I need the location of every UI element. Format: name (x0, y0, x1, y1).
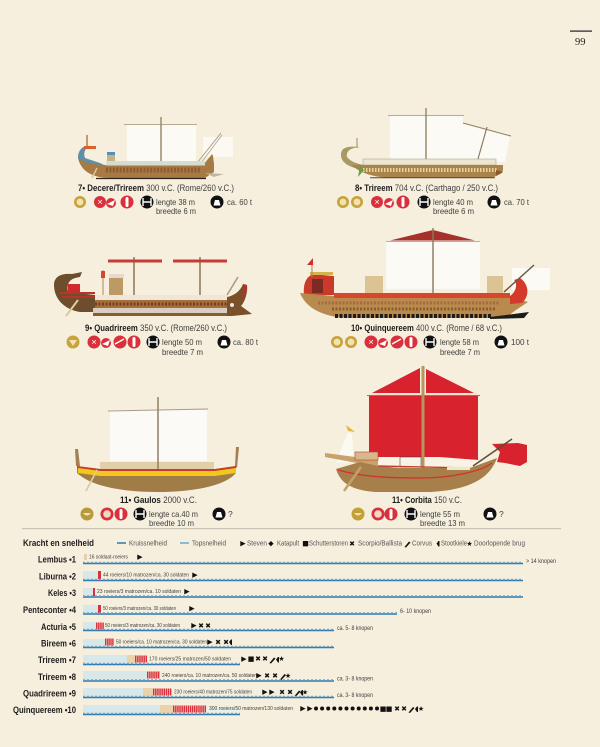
row 9 Quadrireem: ✖ (279, 688, 285, 696)
row 7 Trireem: ★ (278, 655, 285, 663)
icons and dimensions 8: ✕ (374, 198, 380, 206)
legend: Steven (247, 540, 267, 548)
row 9 Quadrireem (23, 688, 373, 699)
row 8 Trireem (38, 671, 373, 682)
icons and dimensions 10: ✕ (368, 338, 374, 346)
row 8 Trireem: 240 roeiers/ca. 10 matrozen/ca. 50 soldaten (162, 673, 257, 679)
row 10 Quinquereem: ★ (418, 705, 424, 713)
icons and dimensions 10: lengte 58 m (440, 337, 479, 347)
title 8: 8• Trireem 704 v.C. (Carthago / 250 v.C.) (355, 183, 498, 193)
row 7 Trireem: ■ (248, 655, 254, 663)
row 10 Quinquereem (13, 704, 424, 715)
icons and dimensions 7: ca. 60 t (227, 197, 253, 207)
row 5 Acturia: ✖ (205, 622, 211, 630)
heading: Kracht en snelheid: Kracht en snelheid (23, 538, 94, 548)
icons and dimensions 10 (331, 336, 530, 357)
row 3 Keles: Keles •3 (48, 588, 76, 598)
legend: ◆ (268, 540, 274, 548)
page number (570, 30, 592, 48)
ship illustration 10 (300, 228, 550, 319)
row 10 Quinquereem: Quinquereem •10 (13, 705, 76, 715)
row 4 Penteconter: 6- 10 knopen (400, 609, 431, 615)
icons and dimensions Corbita: ? (499, 509, 504, 519)
icons and dimensions Corbita (352, 508, 504, 528)
legend: ■ (302, 540, 309, 548)
row 1 Lembus: Lembus •1 (38, 554, 76, 564)
legend: Scorpio/Ballista (358, 540, 402, 548)
row 6 Bireem: ✖ (215, 638, 221, 646)
row 9 Quadrireem: Quadrireem •9 (23, 688, 76, 698)
icons and dimensions 7: lengte 38 m (156, 197, 195, 207)
row 3 Keles: 23 roeiers/3 matrozen/ca. 10 soldaten (97, 589, 181, 595)
icons and dimensions 9 (66, 336, 259, 357)
title 10: 10• Quinquereem 400 v.C. (Rome / 68 v.C.) (351, 323, 502, 333)
icons and dimensions 9: ca. 80 t (233, 337, 259, 347)
legend: Corvus (412, 540, 432, 548)
panel: ship 11 Corbita (325, 366, 527, 528)
row 4 Penteconter (23, 604, 431, 615)
icons and dimensions 9: breedte 7 m (162, 347, 203, 357)
row 1 Lembus: 16 soldaat-roeiers (89, 554, 128, 560)
legend: Schutterstoren (309, 540, 348, 548)
ship illustration 8 (341, 108, 511, 178)
legend: Stootkiele (441, 540, 467, 548)
row 2 Liburna: ▶ (192, 571, 198, 579)
row 2 Liburna: Liburna •2 (39, 572, 76, 582)
row 6 Bireem: 50 roeiers/ca. 10 matrozen/ca. 30 soldaten (116, 640, 207, 646)
icons and dimensions 7: ✕ (97, 198, 103, 206)
legend: ▶ (240, 540, 246, 548)
row 4 Penteconter: 50 roeiers/3 matrozen/ca. 30 soldaten (103, 606, 176, 612)
row 8 Trireem: ▶ (256, 672, 262, 680)
row 6 Bireem: Bireem •6 (41, 638, 76, 648)
row 8 Trireem: ★ (285, 672, 291, 680)
legend: Topsnelheid (192, 540, 226, 548)
row 10 Quinquereem: ▶ (307, 704, 313, 712)
row 2 Liburna: 44 roeiers/10 matrozen/ca. 30 soldaten (103, 572, 189, 578)
row 9 Quadrireem: 230 roeiers/40 matrozen/75 soldaten (174, 690, 252, 696)
legend: ★ (466, 540, 473, 548)
row 7 Trireem: ✖ (255, 655, 261, 663)
panel: ship 7 Decere/Trireem (74, 117, 253, 216)
row 6 Bireem: ▶ (207, 638, 213, 646)
title 11 Corbita: 11• Corbita 150 v.C. (392, 495, 462, 505)
icons and dimensions 7 (74, 196, 253, 216)
legend: Kruissnelheid (129, 540, 167, 548)
row 8 Trireem: ca. 3- 8 knopen (337, 676, 373, 682)
row 9 Quadrireem: ★ (302, 688, 308, 696)
row 6 Bireem: ✖ (223, 638, 229, 646)
row 9 Quadrireem: ▶ (269, 688, 275, 696)
page number: 99 (575, 37, 586, 48)
row 8 Trireem: ✖ (272, 672, 278, 680)
legend: Katapult (277, 540, 299, 548)
row 5 Acturia: 50 roeiers/3 matrozen/ca. 30 soldaten (105, 623, 180, 629)
icons and dimensions Corbita: breedte 13 m (420, 518, 465, 528)
row 1 Lembus: ▶ (137, 553, 143, 561)
icons and dimensions Corbita: lengte 55 m (420, 509, 460, 519)
legend: ✖ (349, 540, 355, 548)
row 3 Keles (48, 588, 523, 598)
row 10 Quinquereem: ■ (386, 705, 392, 713)
row 9 Quadrireem: ca. 3- 8 knopen (337, 693, 373, 699)
row 8 Trireem: Trireem •8 (38, 672, 76, 682)
ship illustration 9 (54, 257, 252, 316)
ship illustration 11 Gaulos (75, 397, 239, 492)
icons and dimensions Gaulos: ? (228, 509, 233, 519)
icons and dimensions 8: lengte 40 m (433, 197, 473, 207)
panel: ship 8 Trireem (337, 108, 530, 216)
row 7 Trireem: ▶ (241, 655, 247, 663)
icons and dimensions 9: lengte 50 m (162, 337, 202, 347)
row 8 Trireem: ✖ (264, 672, 270, 680)
panel: ship 11 Gaulos (75, 397, 239, 528)
title 9: 9• Quadrireem 350 v.C. (Rome/260 v.C.) (85, 323, 227, 333)
ship illustration 11 Corbita (325, 366, 527, 492)
row 7 Trireem (38, 655, 285, 665)
title 7: 7• Decere/Trireem 300 v.C. (Rome/260 v.C.) (78, 183, 234, 193)
icons and dimensions Gaulos: breedte 10 m (149, 518, 194, 528)
row 1 Lembus: > 14 knopen (526, 559, 556, 565)
row 5 Acturia: Acturia •5 (41, 622, 76, 632)
row 9 Quadrireem: ✖ (287, 688, 293, 696)
panel: ship 10 Quinquereem (300, 228, 550, 357)
row 10 Quinquereem: ▶ (300, 704, 306, 712)
icons and dimensions Gaulos: lengte ca.40 m (149, 509, 198, 519)
row 1 Lembus (38, 553, 556, 565)
row 10 Quinquereem: ✖ (394, 705, 400, 713)
icons and dimensions Gaulos (80, 508, 233, 528)
legend: Doorlopende brug (474, 540, 525, 548)
icons and dimensions 8: ca. 70 t (504, 197, 530, 207)
legend (117, 540, 525, 548)
icons and dimensions 8 (337, 196, 530, 216)
ship illustration 7 (78, 117, 233, 178)
icons and dimensions 9: ✕ (91, 338, 97, 346)
row 5 Acturia: ✖ (198, 622, 204, 630)
icons and dimensions 10: 100 t (511, 337, 530, 347)
title 11 Gaulos: 11• Gaulos 2000 v.C. (120, 495, 197, 505)
icons and dimensions 7: breedte 6 m (156, 206, 196, 216)
row 2 Liburna (39, 571, 523, 582)
icons and dimensions 8: breedte 6 m (433, 206, 474, 216)
icons and dimensions 10: breedte 7 m (440, 347, 480, 357)
panel: ship 9 Quadrireem (54, 257, 259, 357)
row 4 Penteconter: Penteconter •4 (23, 605, 76, 615)
row 7 Trireem: Trireem •7 (38, 655, 76, 665)
row 10 Quinquereem: ✖ (401, 705, 407, 713)
chart: kracht en snelheid rows (13, 553, 556, 715)
row 10 Quinquereem: 300 roeiers/50 matrozen/130 soldaten (209, 706, 293, 712)
row 5 Acturia (41, 622, 373, 632)
row 7 Trireem: 170 roeiers/25 matrozen/50 soldaten (149, 656, 231, 662)
row 9 Quadrireem: ▶ (262, 688, 268, 696)
row 6 Bireem (41, 638, 334, 648)
row 4 Penteconter: ▶ (189, 604, 195, 612)
row 10 Quinquereem: ■ (380, 705, 386, 713)
row 5 Acturia: ▶ (191, 622, 197, 630)
row 7 Trireem: ✖ (262, 655, 268, 663)
row 5 Acturia: ca. 5- 8 knopen (337, 626, 373, 632)
row 3 Keles: ▶ (184, 588, 190, 596)
